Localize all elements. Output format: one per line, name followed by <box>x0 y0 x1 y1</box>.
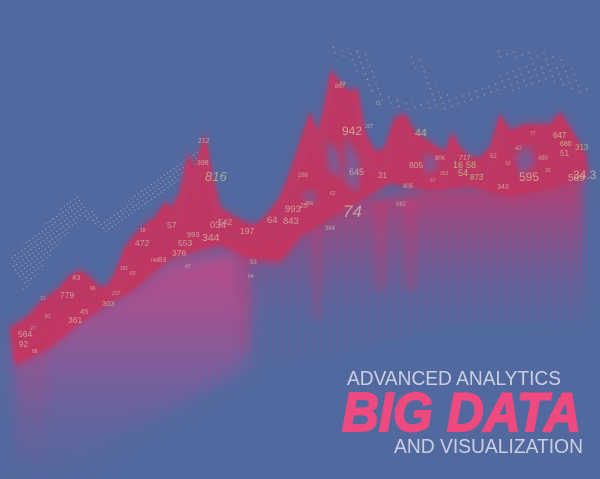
label cluster: centre: 582 <box>396 202 407 208</box>
label cluster: left: 564 <box>18 329 32 339</box>
label cluster: centre: 396 <box>305 201 314 207</box>
label cluster: centre: 64 <box>267 215 278 226</box>
label cluster: centre <box>267 81 427 232</box>
label cluster: centre: 53 <box>340 81 346 87</box>
dotted point cloud: upper right ribbon <box>320 45 590 110</box>
label cluster: left: 81 <box>45 314 51 320</box>
data wave: translucent hollows in the peaks <box>300 135 535 205</box>
label cluster: right: 873 <box>470 173 484 182</box>
label cluster: right: 680 <box>560 141 572 148</box>
data wave: red ridge band <box>10 71 587 364</box>
label cluster: centre: 71 <box>375 101 381 107</box>
label cluster: left: 034 <box>210 220 226 231</box>
label cluster: left: 197 <box>240 226 254 236</box>
label cluster: left: 66 <box>90 286 96 292</box>
data wave: internal ridge strands <box>10 81 585 358</box>
label cluster: centre: 74 <box>343 202 362 221</box>
label cluster: left: 31 <box>40 296 46 302</box>
title line: advanced analytics: ADVANCED ANALYTICS <box>347 367 561 390</box>
title line: and visualization: AND VISUALIZATION <box>394 435 583 458</box>
label cluster: left: 361 <box>68 315 82 325</box>
data wave: long pink fade, left and middle <box>12 250 250 479</box>
label cluster: centre: 25 <box>300 203 308 210</box>
label cluster: left: 376 <box>172 248 186 258</box>
data wave: fade, centre and right <box>235 180 585 355</box>
label cluster: right: 19 <box>505 161 511 167</box>
label cluster: right: 77 <box>530 131 536 137</box>
label cluster: left: 47 <box>185 264 191 270</box>
label cluster: left: 53 <box>250 260 257 266</box>
label cluster: right: 30 <box>545 168 551 174</box>
label cluster: right: 51 <box>560 149 569 158</box>
label cluster: left: 88 <box>32 349 38 355</box>
label cluster: left: 779 <box>60 290 74 300</box>
label cluster: left: 344 <box>202 232 220 244</box>
label cluster: right: 42 <box>515 146 522 152</box>
label cluster: left: 291 <box>120 266 129 272</box>
label cluster: right: 52 <box>490 154 497 160</box>
label cluster: centre: 843 <box>283 216 299 227</box>
label cluster: right <box>430 131 597 191</box>
label cluster: left: 217 <box>112 291 121 297</box>
dotted point cloud: left ribbon <box>9 145 205 292</box>
label cluster: right: 58 <box>466 160 476 170</box>
label cluster: peak <box>197 138 227 184</box>
label cluster: right: 16 <box>453 160 463 170</box>
label cluster: centre: 384 <box>325 226 336 232</box>
data labels: scattered numbers <box>18 81 597 355</box>
data wave: vertical column streaks <box>12 200 585 436</box>
label cluster: left: 472 <box>135 238 149 248</box>
label cluster: centre: 867 <box>335 84 346 90</box>
label cluster: left: 83 <box>158 255 166 264</box>
label cluster: right: 806 <box>435 156 446 162</box>
label cluster: right: 595 <box>519 170 539 184</box>
label cluster: centre: 44 <box>415 127 427 139</box>
title: big data: BIG DATA <box>342 381 581 443</box>
label cluster: right: 717 <box>459 155 471 162</box>
label cluster: centre: 62 <box>330 191 336 197</box>
data wave: outer glow <box>10 68 590 368</box>
label cluster: left: 303 <box>102 299 115 308</box>
label cluster: right: 647 <box>553 131 567 140</box>
label cluster: right: 343 <box>497 184 509 191</box>
label cluster: left: 542 <box>218 217 232 227</box>
label cluster: left: 63 <box>130 271 136 277</box>
label cluster: centre: 805 <box>409 160 423 170</box>
label cluster: centre: 207 <box>365 124 374 130</box>
label cluster: peak: 398 <box>197 160 209 167</box>
label cluster: right: 313 <box>575 143 589 152</box>
label cluster: left: 04 <box>248 274 254 280</box>
label cluster: centre: 31 <box>378 171 387 180</box>
label cluster: centre: 942 <box>342 124 362 138</box>
label cluster: right: 480 <box>538 156 549 162</box>
label cluster: centre: 286 <box>298 173 309 179</box>
label cluster: right: 589 <box>568 173 585 184</box>
label cluster: centre: 805 <box>403 184 414 190</box>
label cluster: right: 34.3 <box>573 168 597 182</box>
label cluster: right: 54 <box>458 168 468 178</box>
label cluster: centre: 645 <box>349 167 364 177</box>
label cluster: centre: 993 <box>285 204 301 215</box>
label cluster: left: 45 <box>80 307 88 316</box>
label cluster: left: 92 <box>19 340 28 349</box>
label cluster: right: 67 <box>430 178 436 184</box>
label cluster: left: 740 <box>150 258 159 264</box>
label cluster: left: 27 <box>30 326 36 332</box>
label cluster: right: 262 <box>440 171 449 177</box>
label cluster: left: 553 <box>178 238 192 248</box>
label cluster: left <box>18 217 257 355</box>
label cluster: left: 43 <box>72 273 80 282</box>
label cluster: left: 18 <box>140 228 146 234</box>
label cluster: peak: 816 <box>205 169 227 184</box>
label cluster: left: 57 <box>167 220 177 230</box>
label cluster: left: 993 <box>187 230 200 239</box>
label cluster: peak: 212 <box>198 138 210 145</box>
